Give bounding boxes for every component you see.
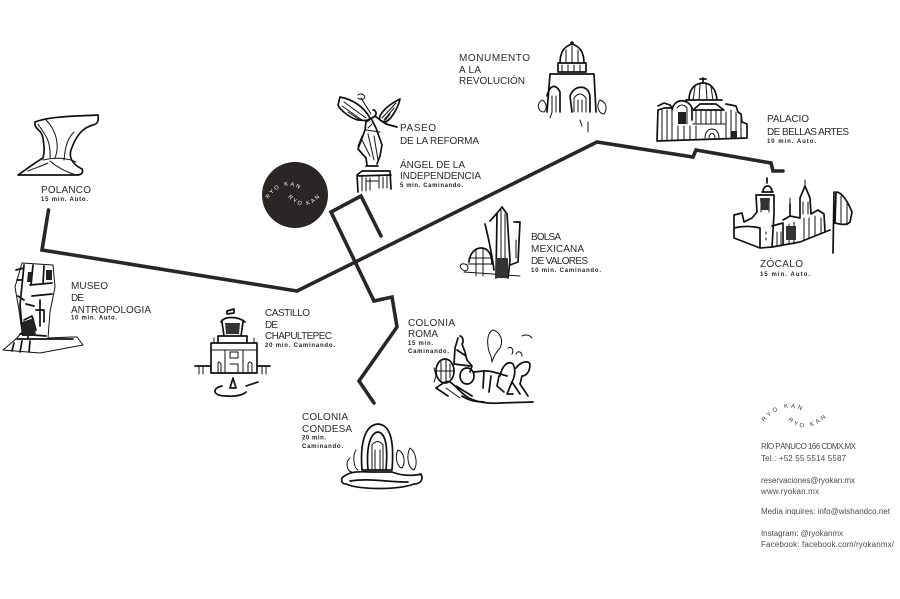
label: Palacio de Bellas Artes <box>767 114 849 145</box>
label: Zocalo: ZÓCALO <box>760 257 803 270</box>
label: Colonia Condesa: CONDESA <box>302 424 352 435</box>
contact logo <box>761 404 826 428</box>
label: Museo de Antropologia <box>71 281 151 322</box>
label: Palacio de Bellas Artes: 10 min. Auto. <box>767 139 816 145</box>
icon: Polanco museum <box>18 115 98 175</box>
contact details: RÍO PÁNUCO 166 CDMX,MX <box>761 442 857 451</box>
icon: Colonia Roma chariot <box>434 330 533 403</box>
label: Castillo de Chapultepec: CHAPULTEPEC <box>265 331 332 342</box>
label: Colonia Condesa: COLONIA <box>302 412 348 423</box>
logo: Ryo Kan circle: RYO KAN <box>265 182 300 198</box>
label: Palacio de Bellas Artes: DE BELLAS ARTES <box>767 127 849 138</box>
label: Colonia Roma <box>408 318 455 355</box>
label: Paseo de la Reforma <box>400 123 481 189</box>
label: Paseo de la Reforma: 5 min. Caminando. <box>400 183 463 189</box>
icon: Colonia Condesa fountain <box>342 424 422 488</box>
label: Monumento a la Revolucion <box>459 53 530 87</box>
label: Zocalo <box>760 257 810 278</box>
contact details: Facebook: facebook.com/ryokanmx/ <box>761 540 895 549</box>
label: Polanco <box>41 185 91 203</box>
logo: Ryo Kan circle: RYO KAN <box>288 194 320 205</box>
label: Museo de Antropologia: ANTROPOLOGIA <box>71 305 151 316</box>
label: Polanco: POLANCO <box>41 185 91 196</box>
contact details: Instagram: @ryokanmx <box>761 529 843 538</box>
label: Paseo de la Reforma: ÁNGEL DE LA <box>400 158 465 171</box>
label: Palacio de Bellas Artes: PALACIO <box>767 114 809 125</box>
label: Zocalo: 15 min. Auto. <box>760 272 810 278</box>
label: Museo de Antropologia: 10 min. Auto. <box>71 316 117 322</box>
label: Paseo de la Reforma: DE LA REFORMA <box>400 136 479 147</box>
label: Bolsa Mexicana de Valores: DE VALORES <box>531 256 588 267</box>
contact details <box>760 442 895 549</box>
icon: Zocalo cathedral and flag <box>734 178 852 253</box>
route: south line <box>331 196 397 403</box>
icon: Bolsa Mexicana de Valores <box>460 207 520 278</box>
contact logo: RYO KAN <box>761 404 802 422</box>
contact details: www.ryokan.mx <box>760 487 819 496</box>
label: Colonia Roma: COLONIA <box>408 318 455 329</box>
contact logo: RYO KAN <box>788 414 826 428</box>
contact details: reservaciones@ryokan.mx <box>761 476 855 485</box>
label: Museo de Antropologia: MUSEO <box>71 281 108 292</box>
label: Castillo de Chapultepec: DE <box>265 320 278 331</box>
label: Castillo de Chapultepec: 20 min. Caminando. <box>265 343 335 349</box>
label: Paseo de la Reforma: INDEPENDENCIA <box>400 171 481 182</box>
label: Bolsa Mexicana de Valores <box>531 232 601 274</box>
label: Monumento a la Revolucion: REVOLUCIÓN <box>459 74 525 87</box>
label: Polanco: 15 min. Auto. <box>41 197 88 203</box>
label: Castillo de Chapultepec <box>265 308 335 349</box>
route: main east-west line <box>42 142 783 291</box>
logo: Ryo Kan circle <box>262 162 328 228</box>
label: Colonia Roma: ROMA <box>408 329 438 340</box>
label: Colonia Roma: Caminando. <box>408 349 449 355</box>
label: Castillo de Chapultepec: CASTILLO <box>265 308 310 319</box>
label: Colonia Roma: 15 min. <box>408 341 433 347</box>
label: Bolsa Mexicana de Valores: MEXICANA <box>531 244 584 255</box>
icon: Monumento a la Revolucion <box>538 41 606 132</box>
label: Colonia Condesa: 20 min. <box>302 436 326 442</box>
label: Bolsa Mexicana de Valores: BOLSA <box>531 232 561 243</box>
label: Museo de Antropologia: DE <box>71 293 84 304</box>
label: Monumento a la Revolucion: A LA <box>459 65 481 76</box>
label: Colonia Condesa: Caminando. <box>302 444 343 450</box>
icon: Museo de Antropologia <box>3 263 83 353</box>
icon: Palacio de Bellas Artes <box>657 78 747 141</box>
label: Monumento a la Revolucion: MONUMENTO <box>459 53 530 64</box>
icon: Angel de la Independencia <box>338 94 400 192</box>
label: Bolsa Mexicana de Valores: 10 min. Caminando. <box>531 268 601 274</box>
label: Colonia Condesa <box>302 412 352 450</box>
label: Paseo de la Reforma: PASEO <box>400 123 436 134</box>
contact details: Tel.: +52 55 5514 5587 <box>761 454 847 463</box>
icon: Castillo de Chapultepec <box>195 309 270 396</box>
contact details: Media inquires: info@wishandco.net <box>761 507 891 516</box>
